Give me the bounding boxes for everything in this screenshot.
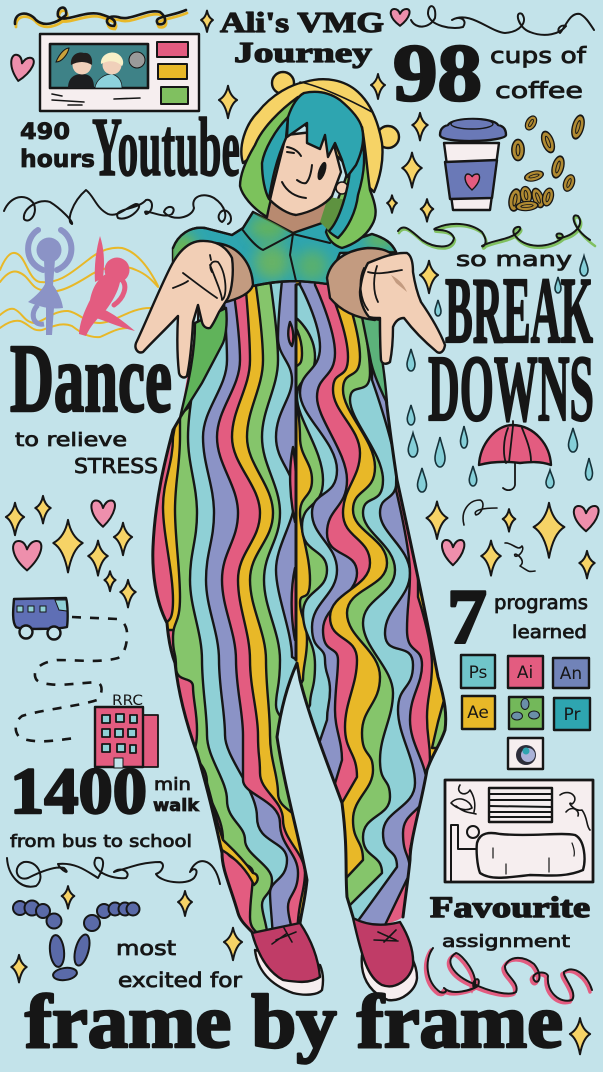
icon: Ps: Ps	[469, 663, 488, 683]
title: Ali's VMG	[220, 7, 384, 39]
stat: 1400 min walk	[10, 755, 200, 852]
label: favourite assignment	[430, 891, 590, 952]
stat: 98 cups of coffee: cups of	[490, 44, 588, 69]
label: so many breakdowns: so many	[456, 247, 572, 271]
character: right hand	[327, 248, 445, 364]
stat: 490 hours youtube: hours	[20, 145, 95, 173]
sparkles and hearts: left cluster	[6, 496, 136, 607]
stat: 98 cups of coffee: 98	[393, 27, 482, 118]
sparkles and hearts: right cluster	[426, 500, 599, 578]
rain drops	[407, 256, 592, 492]
left shoe	[252, 923, 323, 995]
icon: seventh program	[508, 738, 543, 769]
icons: software programs	[461, 655, 590, 769]
headline: frame by frame: frame by frame	[25, 980, 563, 1064]
stat: 98 cups of coffee	[393, 27, 588, 118]
sparkles: top	[201, 11, 438, 293]
squiggle: under walk	[7, 858, 220, 887]
label: favourite assignment: Favourite	[430, 891, 590, 924]
icon: Pr: Pr	[564, 705, 580, 725]
character: neck	[262, 190, 334, 236]
squiggle: bottom right	[426, 948, 592, 1003]
icon: coffee cup	[440, 119, 506, 210]
left leg stripes	[154, 282, 306, 932]
icon: exclamation made of dots	[13, 900, 140, 982]
icon: favourite assignment room	[445, 780, 593, 882]
hair teal right strand	[329, 130, 364, 238]
squiggle: top left	[15, 8, 187, 29]
stat: 1400 min walk: walk	[153, 796, 200, 816]
plants	[451, 785, 590, 830]
label: dance: to relieve	[15, 429, 127, 451]
label: favourite assignment: assignment	[442, 932, 570, 952]
dashed path: bus to school	[16, 617, 127, 741]
label: most excited for: most	[116, 936, 176, 960]
label: most excited for: excited for	[118, 968, 243, 992]
icon: blue dancer	[28, 230, 71, 335]
squiggle: right under coffee	[398, 215, 595, 248]
icon: bus	[13, 598, 68, 640]
character: left hand	[135, 241, 253, 377]
icon: coffee beans	[507, 114, 586, 212]
icon: An: An	[560, 664, 582, 684]
icon: youtube screen	[40, 34, 199, 111]
stat: 98 cups of coffee: coffee	[495, 79, 583, 104]
stat: 1400 min walk: 1400	[10, 755, 147, 828]
icon: Ai: Ai	[517, 663, 533, 683]
stat: 7 programs learned: programs	[494, 592, 588, 614]
hair bangs	[287, 92, 363, 177]
icon: umbrella	[479, 421, 551, 490]
character: rainbow pants	[151, 282, 448, 933]
title	[220, 7, 384, 69]
face	[270, 130, 341, 215]
sidebar thumbnails	[157, 42, 188, 104]
icon: blender tri-blade	[509, 697, 543, 729]
character: head and hat	[240, 72, 399, 248]
stat: 490 hours youtube: 490	[20, 120, 70, 145]
stat: 490 hours youtube	[20, 101, 240, 194]
bed	[451, 825, 584, 881]
label: dance: STRESS	[74, 454, 158, 478]
stat: 1400 min walk: min	[154, 775, 191, 795]
stat: 1400 min walk: from bus to school	[10, 832, 192, 852]
right leg stripes	[296, 282, 444, 924]
character: shirt	[169, 212, 396, 418]
video thumbnail	[50, 44, 148, 88]
icon: RRC school building: RRC	[112, 693, 143, 709]
shirt tail right	[362, 317, 387, 403]
icon: pink dancer	[79, 236, 135, 336]
stat: 7 programs learned: 7	[447, 573, 487, 660]
squiggle: under youtube	[4, 190, 231, 224]
label: dance: Dance	[10, 325, 172, 433]
label: so many breakdowns	[428, 247, 594, 441]
hair teal left strand	[262, 117, 288, 199]
right shoe	[353, 918, 417, 1000]
yellow waves behind dancers	[0, 248, 158, 337]
shirt tail left	[180, 308, 227, 418]
icon: heart	[391, 9, 410, 26]
face details	[287, 147, 301, 156]
stat: 7 programs learned	[447, 573, 588, 660]
label: dance	[10, 325, 172, 478]
icon: heart	[7, 54, 35, 83]
character: shoes	[252, 918, 417, 1000]
label: most excited for	[116, 936, 243, 992]
title: Journey	[234, 38, 372, 69]
pants outline	[153, 285, 446, 932]
squiggle: top right	[411, 6, 594, 35]
icon: Ae: Ae	[467, 703, 489, 723]
hat	[241, 79, 383, 192]
hair back green	[240, 97, 298, 217]
sparkles: bottom	[11, 886, 590, 1054]
infographic canvas: Youtube	[92, 101, 240, 194]
ear	[336, 182, 348, 194]
icon: RRC school building	[95, 693, 158, 768]
window	[489, 788, 552, 822]
hat ears	[272, 72, 294, 94]
stat: 7 programs learned: learned	[512, 622, 587, 643]
